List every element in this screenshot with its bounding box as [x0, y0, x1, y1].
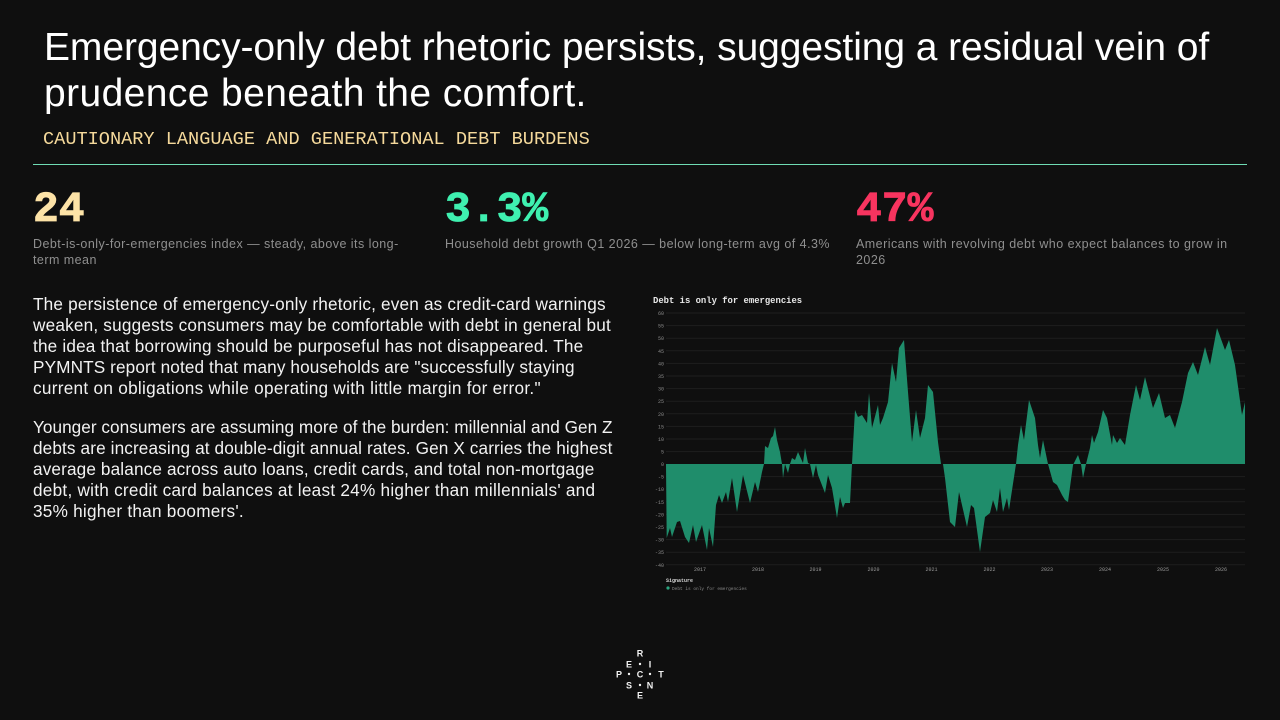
logo: letter mark: P	[616, 670, 622, 680]
body text: first paragraph: the idea that borrowing should be purposeful has not disappeared. The	[33, 336, 583, 356]
y axis labels: 20	[658, 412, 664, 418]
area series	[666, 328, 1245, 552]
legend	[666, 578, 747, 592]
y axis labels: 15	[658, 424, 664, 430]
stat: 24 index: term mean	[33, 253, 97, 267]
y axis labels: 25	[658, 399, 664, 405]
logo: letter mark: C	[637, 670, 644, 680]
x axis labels: 2026	[1215, 567, 1227, 573]
y axis labels: 30	[658, 386, 664, 392]
x axis labels: 2024	[1099, 567, 1111, 573]
y axis labels: 0	[661, 462, 664, 468]
y axis labels: -35	[655, 550, 664, 556]
y axis labels: 40	[658, 362, 664, 368]
x axis labels: 2018	[752, 567, 764, 573]
body text: second paragraph: average balance across auto loans, credit cards, and total non-mortgage	[33, 459, 594, 479]
stat: 3.3% household debt growth	[445, 185, 830, 251]
y axis labels: 60	[658, 311, 664, 317]
logo: letter mark: N	[647, 680, 653, 690]
y axis labels: -5	[658, 474, 664, 480]
y axis labels: 10	[658, 437, 664, 443]
legend: Debt is only for emergencies	[672, 586, 747, 592]
title: Emergency-only debt rhetoric persists, suggesting a residual vein of	[44, 26, 1209, 69]
stat: 3.3% household debt growth: 3.3%	[445, 185, 548, 234]
stat: 24 index: Debt-is-only-for-emergencies index — steady, above its long-	[33, 237, 399, 251]
x axis labels: 2025	[1157, 567, 1169, 573]
logo: letter mark: E	[637, 690, 643, 700]
body text: second paragraph: Younger consumers are assuming more of the burden: millennial and Gen Z	[33, 417, 613, 437]
body text: first paragraph: PYMNTS report noted that many households are "successfully staying	[33, 357, 575, 377]
y axis labels: -30	[655, 538, 664, 544]
x axis labels: 2023	[1041, 567, 1053, 573]
y axis labels: 5	[661, 450, 664, 456]
title: prudence beneath the comfort.	[44, 72, 587, 115]
stat: 47% revolving debt: Americans with revolving debt who expect balances to grow in	[856, 237, 1228, 251]
body text: second paragraph: debt, with credit card balances at least 24% higher than millennials' and	[33, 480, 595, 500]
logo: letter mark	[616, 648, 664, 700]
x axis labels: 2019	[809, 567, 822, 573]
body text: first paragraph: current on obligations while operating with little margin for error."	[33, 378, 541, 398]
x axis labels: 2022	[983, 567, 996, 573]
stat: 47% revolving debt: 47%	[856, 185, 933, 234]
y axis labels: -10	[655, 487, 664, 493]
x axis labels	[694, 567, 1227, 573]
stat: 47% revolving debt: 2026	[856, 253, 886, 267]
x axis labels: 2017	[694, 567, 706, 573]
logo: letter mark: I	[649, 660, 651, 670]
y axis labels: 55	[658, 324, 664, 330]
logo: letter mark: R	[637, 648, 644, 658]
stat: 47% revolving debt	[856, 185, 1228, 267]
x axis labels: 2020	[867, 567, 880, 573]
area chart: debt is only for emergencies	[653, 296, 1245, 592]
chart title: Debt is only for emergencies	[653, 296, 802, 306]
y axis labels: 50	[658, 336, 664, 342]
body text: second paragraph: debts are increasing at double-digit annual rates. Gen X carries the highest	[33, 438, 613, 458]
body text: first paragraph	[33, 294, 611, 398]
y axis labels: -15	[655, 500, 664, 506]
y axis labels: 35	[658, 374, 664, 380]
y axis labels: -25	[655, 525, 664, 531]
stat: 3.3% household debt growth: Household debt growth Q1 2026 — below long-term avg of 4.3%	[445, 237, 830, 251]
y axis labels: -20	[655, 512, 664, 518]
x axis labels: 2021	[925, 567, 938, 573]
y axis labels	[655, 311, 664, 569]
y axis labels: -40	[655, 563, 664, 569]
logo: letter mark: T	[658, 670, 664, 680]
logo: letter mark: S	[626, 680, 632, 690]
body text: second paragraph	[33, 417, 613, 521]
body text: second paragraph: 35% higher than boomers'.	[33, 501, 244, 521]
stat: 24 index	[33, 185, 399, 267]
body text: first paragraph: The persistence of emergency-only rhetoric, even as credit-card warnings	[33, 294, 606, 314]
subtitle: CAUTIONARY LANGUAGE AND GENERATIONAL DEBT BURDENS	[43, 129, 590, 150]
y axis labels: 45	[658, 349, 664, 355]
stat: 24 index: 24	[33, 185, 85, 234]
logo: letter mark: E	[626, 660, 632, 670]
body text: first paragraph: weaken, suggests consumers may be comfortable with debt in general but	[33, 315, 611, 335]
legend: Signature	[666, 578, 693, 584]
title	[44, 26, 1210, 115]
